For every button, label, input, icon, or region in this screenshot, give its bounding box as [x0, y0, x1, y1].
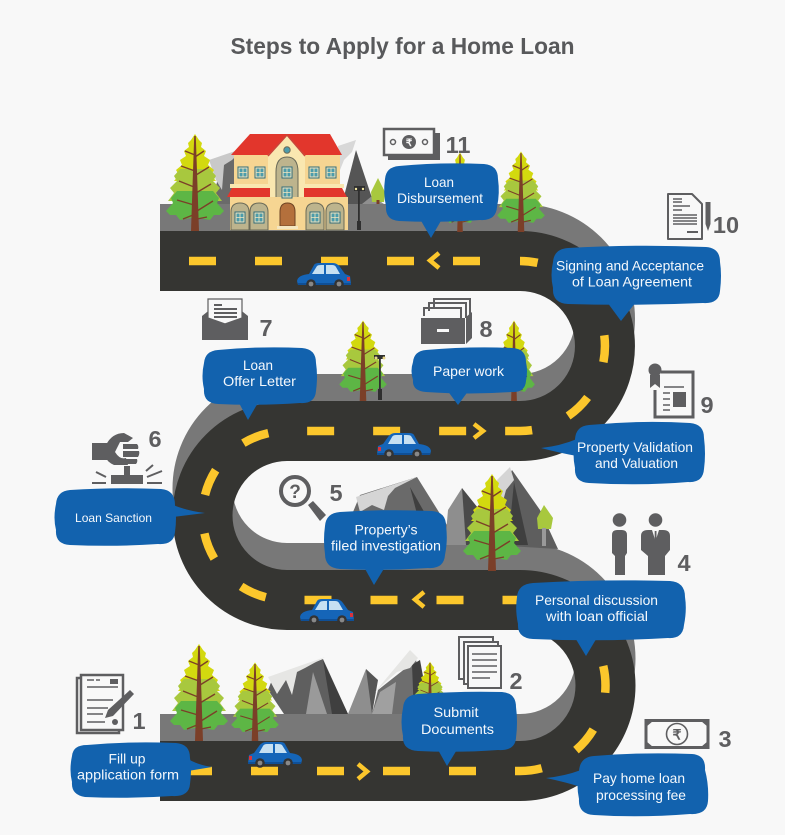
road asphalt: [160, 261, 606, 771]
step 7: icon, number, bubble: [202, 299, 317, 420]
icon: stamp in hand: [92, 433, 162, 484]
bubble: loan sanction: Loan Sanction: [75, 511, 152, 525]
number 11: 11: [446, 132, 470, 158]
bubble: submit documents: Submit: [434, 704, 479, 720]
icon: two people: [612, 513, 670, 575]
bubble: loan sanction: [54, 488, 205, 546]
scenery: top mountains: [209, 140, 384, 204]
house: [227, 134, 348, 230]
step 5: icon, number, bubble: [281, 477, 447, 585]
road centre dashes: [185, 261, 606, 771]
step 1: icon, number, bubble: [70, 675, 212, 798]
bubble: submit documents: [402, 692, 517, 766]
bubble: signing and acceptance of loan agreement: [552, 246, 721, 321]
step 6: icon, number, bubble: [54, 426, 205, 546]
scenery: middle mountains: [353, 467, 558, 549]
step 3: icon, number, bubble: [546, 720, 732, 816]
number 9: 9: [700, 392, 714, 418]
small bush top: [371, 178, 385, 205]
number 2: 2: [509, 668, 523, 694]
road shoulder: [160, 234, 606, 744]
bubble: fill up application form: [70, 742, 212, 798]
bubble: property validation and valuation: and Valuation: [595, 455, 678, 471]
icon: rupee note: ₹: [673, 726, 682, 742]
bubble: pay home loan processing fee: Pay home loan: [593, 770, 685, 786]
lamp posts: [354, 186, 386, 400]
icon: file box: [421, 299, 472, 344]
bubble: loan disbursement: Loan: [424, 174, 454, 190]
bubble: personal discussion with loan official: with loan official: [545, 608, 648, 624]
step 2: icon, number, bubble: [402, 637, 523, 766]
bubble: loan offer letter: Offer Letter: [223, 373, 296, 389]
bubble: pay home loan processing fee: processing fee: [596, 787, 686, 803]
number 10: 10: [713, 212, 739, 238]
scenery: bottom mountains: [268, 650, 430, 714]
trees: [166, 134, 545, 741]
bubble: fill up application form: application form: [77, 766, 179, 782]
step 8: icon, number, bubble: [412, 299, 527, 405]
bubble: property's filed investigation: filed investigation: [331, 538, 441, 554]
number 3: 3: [718, 726, 732, 752]
icon: rupee banknotes: ₹: [406, 138, 413, 149]
bubble: property validation and valuation: [541, 422, 705, 484]
number 5: 5: [329, 480, 343, 506]
bubble: pay home loan processing fee: [546, 753, 708, 816]
icon: agreement and pen: [668, 194, 710, 239]
title: Steps to Apply for a Home Loan: [230, 33, 574, 59]
bubble: fill up application form: Fill up: [108, 750, 146, 766]
icon: envelope with letter: [202, 299, 248, 340]
step 9: icon, number, bubble: [541, 364, 714, 484]
number 6: 6: [148, 426, 162, 452]
step 10: icon, number, bubble: [552, 194, 739, 321]
bubble: signing and acceptance of loan agreement: Signing and Acceptance: [556, 258, 704, 274]
bubble: loan offer letter: [202, 347, 317, 420]
icon: rupee note: [646, 720, 708, 748]
number 1: 1: [132, 708, 146, 734]
icon: magnifier with question mark: ?: [289, 482, 301, 503]
bubble: property's filed investigation: Property’s: [354, 522, 418, 538]
step 11: icon, number, bubble: [384, 129, 499, 238]
icon: application form with pencil: [77, 675, 134, 733]
bubble: personal discussion with loan official: Personal discussion: [535, 592, 658, 608]
bubble: property validation and valuation: Property Validation: [577, 439, 693, 455]
step 4: icon, number, bubble: [516, 513, 691, 656]
number 8: 8: [479, 316, 493, 342]
number 7: 7: [259, 315, 273, 341]
bubble: paper work: Paper work: [433, 363, 505, 379]
bubble: property's filed investigation: [324, 510, 447, 585]
bubble: loan offer letter: Loan: [243, 357, 273, 373]
bubble: submit documents: Documents: [421, 721, 494, 737]
bubble: signing and acceptance of loan agreement: of Loan Agreement: [572, 274, 692, 290]
bubble: loan disbursement: [384, 163, 499, 238]
cars: [248, 263, 431, 768]
direction chevrons: [358, 253, 483, 779]
icon: stack of documents: [459, 637, 501, 688]
bubble: loan disbursement: Disbursement: [397, 190, 483, 206]
icon: magnifier with question mark: [281, 477, 326, 521]
bubble: personal discussion with loan official: [516, 580, 686, 656]
icon: certificate: [648, 364, 693, 417]
number 4: 4: [677, 550, 691, 576]
